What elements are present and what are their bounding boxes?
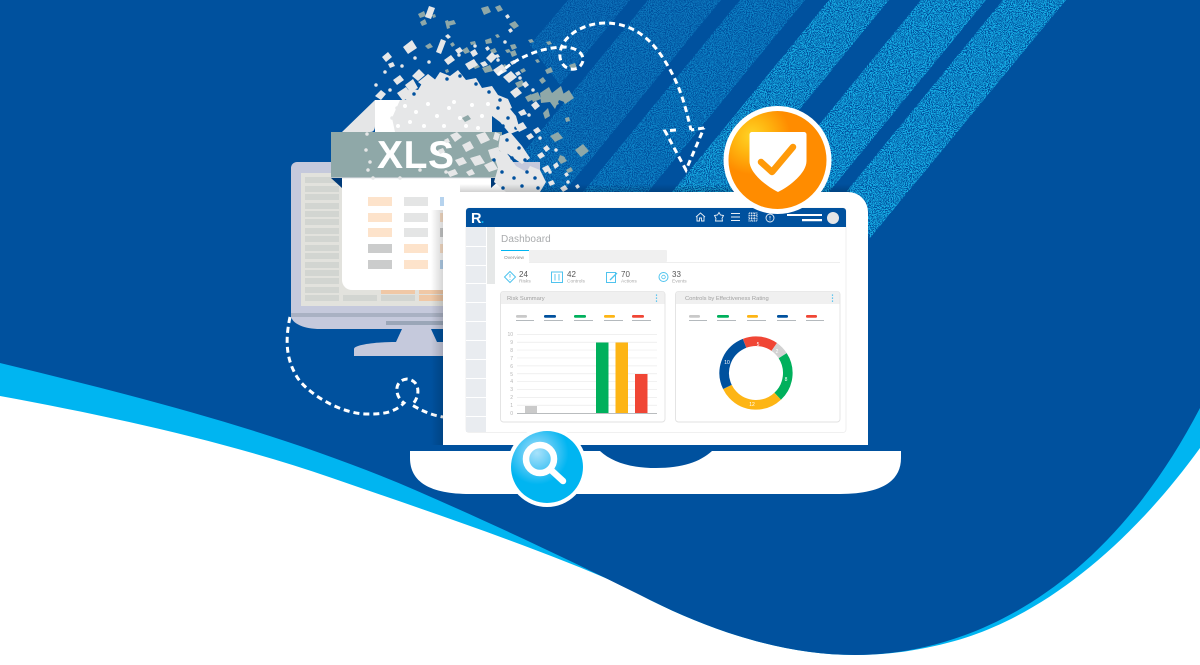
page fold	[342, 100, 375, 132]
donut chart: 5	[757, 342, 760, 348]
stat: events: Events	[672, 278, 687, 284]
dashboard screen	[466, 208, 846, 432]
donut chart	[711, 328, 801, 418]
bar chart: 0	[510, 411, 513, 417]
monitor chin	[291, 315, 500, 329]
monitor behind laptop	[291, 162, 540, 356]
stat: controls: Controls	[567, 278, 585, 284]
logo: R	[471, 211, 482, 227]
dashed arrow: monitor to laptop	[287, 317, 443, 417]
icon: shield	[750, 132, 806, 192]
cyan accent wave	[0, 363, 1200, 655]
bar chart: 10	[507, 332, 513, 338]
stat: risks: 24	[519, 270, 528, 279]
white specks on page	[398, 102, 488, 128]
panel: controls by effectiveness rating: Controls by Effectiveness Rating	[685, 296, 769, 302]
icon: magnifying glass	[526, 445, 563, 481]
panel: risk summary	[500, 292, 665, 422]
banner	[331, 132, 502, 178]
banner debris	[438, 132, 501, 177]
panel: controls by effectiveness rating	[676, 292, 840, 422]
mottled page top	[392, 100, 492, 132]
stat: actions: Actions	[621, 278, 637, 284]
stats row	[504, 270, 687, 284]
XLS document	[331, 100, 540, 290]
panel: risk summary: Risk Summary	[507, 296, 545, 302]
table cells	[368, 197, 444, 269]
stat: risks	[504, 270, 531, 284]
nav icons	[696, 212, 774, 222]
main debris mass	[403, 70, 512, 112]
tabs: Overview	[504, 255, 525, 261]
donut chart: 2	[776, 349, 779, 355]
dashed arrow: document to dashboard	[498, 23, 704, 170]
stat: controls: 42	[567, 270, 576, 279]
bar chart: 1	[510, 403, 513, 409]
stat: actions	[606, 270, 637, 284]
XLS label: XLS	[377, 134, 455, 177]
stat: controls	[552, 270, 585, 284]
arrow curve	[498, 23, 691, 130]
arrow head	[665, 128, 704, 170]
panel header	[501, 292, 664, 304]
icon: check mark	[761, 147, 793, 172]
bar chart: 2	[510, 395, 513, 401]
light fragments	[375, 6, 580, 192]
grey-green fragments	[418, 5, 589, 173]
top navigation bar	[466, 208, 846, 227]
avatar	[827, 212, 839, 224]
donut chart: 8	[785, 377, 788, 383]
badge: magnifier	[507, 427, 587, 507]
laptop shadow	[431, 210, 443, 445]
sidebar	[466, 227, 495, 432]
document page	[342, 178, 540, 290]
panel header	[676, 292, 840, 304]
tabs	[501, 250, 840, 263]
legend	[516, 315, 651, 321]
bar chart: 3	[510, 387, 513, 393]
grey-green cluster	[540, 86, 574, 109]
bar chart: 5	[510, 372, 513, 378]
badge: shield check	[724, 106, 832, 214]
stat: events: 33	[672, 270, 681, 279]
banner folds	[331, 178, 342, 188]
blue gaps in debris	[414, 76, 538, 188]
stat: risks: Risks	[519, 278, 531, 284]
donut chart: 10	[724, 360, 730, 366]
dotted diagonal stripes	[491, 0, 1080, 245]
legend	[689, 315, 824, 321]
bar chart: 6	[510, 364, 513, 370]
bar chart: 8	[510, 348, 513, 354]
laptop base	[410, 451, 901, 494]
user name bars	[787, 214, 822, 221]
stat: events	[659, 270, 687, 284]
laptop lid	[443, 192, 868, 445]
stat: actions: 70	[621, 270, 630, 279]
bar chart: 7	[510, 356, 513, 362]
bar chart	[507, 332, 657, 417]
debris band	[492, 100, 546, 192]
monitor body	[291, 162, 540, 315]
donut chart: 12	[749, 402, 755, 408]
bar chart: 9	[510, 340, 513, 346]
monitor stand	[396, 329, 437, 342]
round specks	[366, 42, 568, 182]
disintegrating particles	[366, 5, 589, 192]
page title: Dashboard	[501, 234, 551, 245]
bar chart: 4	[510, 379, 513, 385]
laptop	[410, 184, 901, 494]
monitor spreadsheet	[301, 173, 501, 306]
